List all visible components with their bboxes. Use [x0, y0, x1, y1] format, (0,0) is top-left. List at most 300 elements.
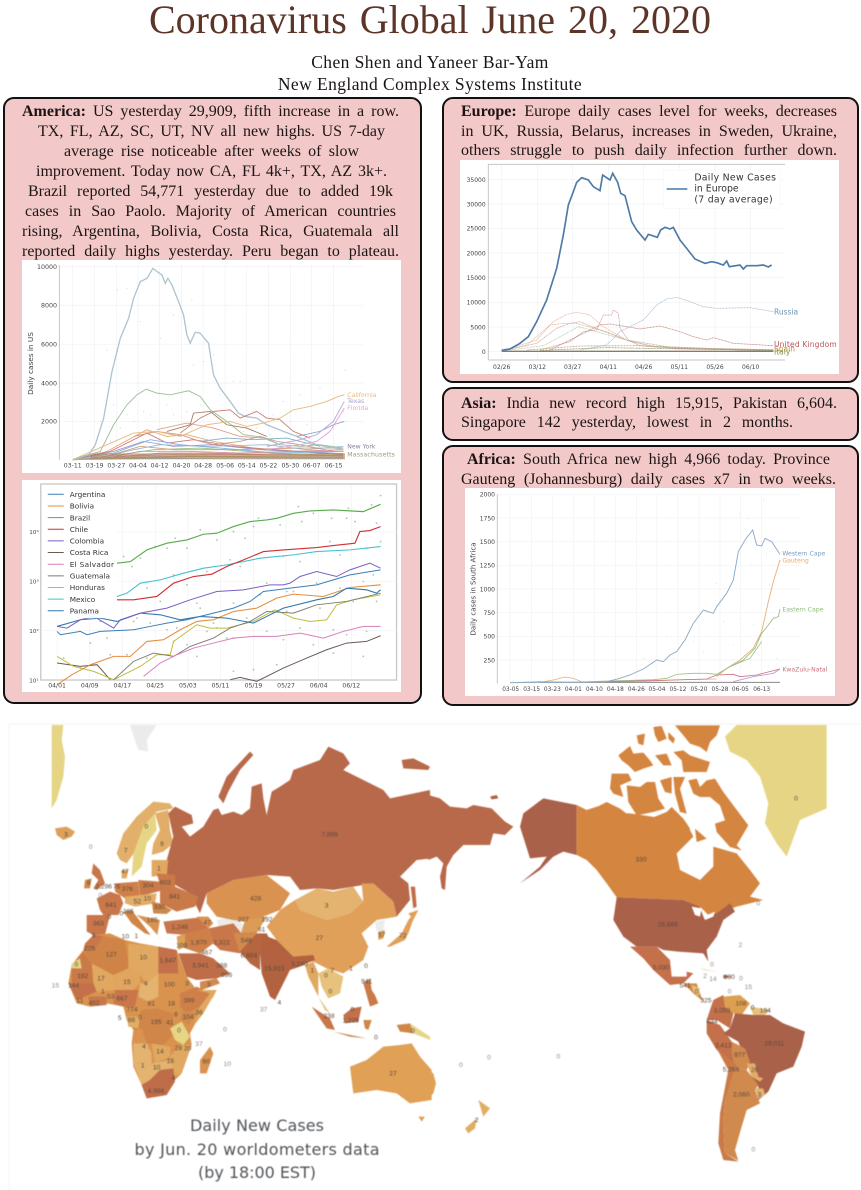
Europe text: in UK, Russia, Belarus, increases in Sweden, Ukraine, [461, 122, 837, 140]
map labels: Eurasia and Africa: 53 [107, 993, 115, 1000]
chart: Latin American countries (log scale): 10² [29, 628, 39, 635]
map labels: Eurasia and Africa: 104 [182, 1014, 194, 1021]
map labels: Americas: 0 [739, 975, 743, 982]
New Jersey line [73, 389, 343, 460]
map labels: Americas: 29,011 [764, 1041, 785, 1048]
map labels: Eurasia and Africa: 1,647 [159, 957, 176, 964]
map labels: Eurasia and Africa: 1 [134, 933, 138, 940]
chart: South Africa provinces: 06-13 [753, 687, 770, 693]
province labels: Eastern Cape [782, 606, 824, 613]
chart: Europe daily new cases: 03/12 [529, 364, 546, 371]
map: Americas and Pacific [428, 725, 827, 1162]
map labels: Eurasia and Africa: 207 [238, 917, 249, 924]
chart: daily cases in US: 03-27 [107, 462, 125, 469]
chart: Latin American countries (log scale): 10³ [29, 579, 39, 586]
map labels: Eurasia and Africa: 1 [157, 866, 161, 873]
map labels: Eurasia and Africa: 195 [150, 1019, 162, 1026]
map labels: Americas: 3,413 [715, 1043, 732, 1050]
chart: Latin American countries (log scale): 06/12 [342, 682, 360, 689]
map labels: Eurasia and Africa: 546 [241, 938, 252, 945]
map labels: Eurasia and Africa: 388 [216, 963, 228, 970]
map labels: Eurasia and Africa: 1 [101, 988, 105, 995]
chart: Latin American countries (log scale): 06/04 [310, 682, 328, 689]
map labels: Eurasia and Africa: 226 [84, 945, 96, 952]
map labels: Eurasia and Africa: 0 [223, 1026, 227, 1033]
map labels: Eurasia and Africa: 72 [399, 933, 407, 940]
Panama [57, 588, 381, 626]
map labels: Eurasia and Africa: 6 [87, 880, 91, 887]
map labels: Americas: 2,060 [733, 1092, 750, 1099]
chart: daily cases in US: 04-04 [129, 462, 147, 469]
map labels: Eurasia and Africa: 36 [195, 1010, 203, 1017]
map labels: Americas: 2 [738, 942, 742, 949]
chart: South Africa provinces: 2000 [480, 492, 495, 499]
map labels: Eurasia and Africa: 109 [176, 943, 188, 950]
map labels: Eurasia and Africa: 27 [316, 935, 323, 942]
chart: South Africa provinces: 04-18 [607, 687, 624, 693]
Europe text: Europe: Europe daily cases level for weeks, decreases [461, 103, 837, 120]
chart: Europe daily new cases: 05/11 [671, 364, 688, 371]
map labels: Eurasia and Africa: 3 [64, 831, 68, 838]
map labels: Eurasia and Africa: 0 [119, 911, 123, 918]
legend: Brazil [70, 513, 90, 522]
Europe text [461, 103, 837, 158]
map labels: Eurasia and Africa: 265 [123, 909, 134, 916]
America text: improvement. Today now CA, FL 4k+, TX, AZ 3k+. [36, 163, 387, 180]
chart: Europe daily new cases [460, 160, 839, 374]
map labels: Eurasia and Africa: 15 [123, 979, 131, 986]
map labels: Eurasia and Africa: 10 [122, 934, 129, 941]
world map [51, 724, 828, 1182]
map labels: Americas: 2 [475, 1117, 479, 1124]
map labels: Eurasia and Africa: 330 [154, 904, 165, 911]
chart: daily cases in US: 05-22 [259, 462, 277, 469]
map labels: Eurasia and Africa: 20 [184, 1046, 192, 1053]
map labels: Eurasia and Africa: 7 [330, 967, 334, 974]
map labels: Eurasia and Africa: 60 [203, 1059, 210, 1066]
map labels: Eurasia and Africa: 100 [164, 981, 175, 988]
map labels: Eurasia and Africa: 1 [349, 966, 353, 973]
map labels: Eurasia and Africa: 0 [74, 962, 78, 969]
map labels: Eurasia and Africa: 27 [389, 1070, 397, 1077]
chart: daily cases in US [22, 260, 401, 473]
map labels: Eurasia and Africa: 15 [52, 982, 59, 989]
authors: New England Complex Systems Institute [278, 74, 582, 94]
map labels: Eurasia and Africa: 1,226 [342, 1018, 359, 1025]
map labels: Eurasia and Africa: 192 [77, 973, 89, 980]
province labels [782, 551, 828, 673]
map labels: Eurasia and Africa: 47 [204, 919, 211, 926]
South America [707, 995, 733, 1028]
map labels: Eurasia and Africa: 2,296 [95, 883, 112, 890]
chart: South Africa provinces: 04-26 [628, 687, 645, 693]
panel: Asia [442, 387, 859, 441]
map labels: Eurasia and Africa: 144 [68, 983, 80, 990]
map labels: Eurasia and Africa: 10 [224, 1061, 231, 1068]
chart: daily cases in US: 10000 [37, 264, 57, 271]
America text [22, 103, 399, 260]
map labels: Americas: 14 [709, 976, 717, 983]
America text: cases in Sao Paolo. Majority of American countries [25, 203, 396, 220]
Baltics [152, 860, 168, 877]
chart: South Africa provinces: 1000 [480, 586, 495, 593]
map labels: Eurasia and Africa: 376 [122, 886, 133, 893]
America text: average rise noticeable after weeks of slow [64, 143, 359, 160]
map labels: Eurasia and Africa: 47 [121, 869, 129, 876]
map labels: Eurasia and Africa: 467 [201, 950, 213, 957]
map labels: Eurasia and Africa: 6,604 [241, 953, 258, 960]
map labels: Americas [459, 795, 798, 1153]
chart legend: (7 day average) [694, 195, 773, 206]
South Asia and Middle East [180, 928, 213, 953]
map labels: Eurasia and Africa: 1 [310, 968, 314, 975]
Asia text: Singapore 142 yesterday, lowest in 2 months. [461, 414, 793, 431]
map labels: Eurasia and Africa: 941 [361, 978, 373, 985]
map labels: Eurasia and Africa: 76 [113, 883, 121, 890]
state labels: California [347, 392, 377, 399]
chart: Latin American countries (log scale): 10⁴ [29, 529, 39, 536]
chart: Latin American countries (log scale) [22, 480, 401, 692]
panel: America [3, 97, 422, 704]
chart: South Africa provinces: 06-05 [732, 687, 749, 693]
chart: Europe daily new cases: 02/26 [493, 364, 510, 371]
Europe total line [502, 173, 772, 350]
Canada [577, 803, 763, 917]
map labels: Eurasia and Africa: 37 [195, 1041, 203, 1048]
map labels: Eurasia and Africa: 192 [261, 917, 273, 924]
map labels: Eurasia and Africa: 3 [185, 981, 189, 988]
map caption: Daily New Cases [190, 1116, 324, 1135]
chart: South Africa provinces: 500 [484, 634, 495, 641]
map labels: Eurasia and Africa: 4 [277, 1000, 281, 1007]
legend: Argentina [70, 490, 105, 499]
map labels: Americas: 0 [756, 901, 760, 908]
Florida line [267, 408, 344, 450]
chart: daily cases in US: 05-30 [281, 462, 299, 469]
chart: Europe daily new cases: 03/27 [564, 364, 581, 371]
chart: South Africa provinces: 03-05 [502, 687, 519, 693]
legend: Chile [70, 525, 89, 534]
map labels: Americas: 3 [757, 1091, 761, 1098]
map labels: Americas: 0 [751, 1146, 755, 1153]
Africa text: Gauteng (Johannesburg) daily cases x7 in two weeks. [461, 470, 836, 488]
map labels: Eurasia and Africa: 238 [323, 1013, 335, 1020]
chart: Europe daily new cases: 04/26 [635, 364, 652, 371]
Africa [68, 933, 217, 1098]
map caption: by Jun. 20 worldometers data [134, 1140, 380, 1159]
Texas line [267, 401, 344, 446]
map labels: Eurasia and Africa: 641 [105, 902, 117, 909]
map labels: Eurasia and Africa: 3 [325, 903, 329, 910]
map labels: Eurasia and Africa: 7 [124, 847, 128, 854]
Bolivia [57, 585, 381, 685]
map labels: Eurasia and Africa: 0 [328, 989, 332, 996]
legend: Honduras [70, 583, 105, 592]
map labels: Americas: 0 [556, 1054, 560, 1061]
Brazil [117, 504, 381, 563]
chart: Latin American countries (log scale): 04/09 [81, 682, 99, 689]
chart: South Africa provinces: 04-01 [565, 687, 582, 693]
chart: South Africa provinces [465, 488, 835, 696]
Gauteng line [717, 560, 780, 677]
authors [278, 52, 582, 94]
map labels: Eurasia and Africa: 0 [374, 1034, 378, 1041]
chart: daily cases in US: 2000 [41, 419, 57, 426]
map labels: Americas: 5,266 [723, 1067, 740, 1074]
map labels: Eurasia and Africa: 8 [174, 1011, 178, 1018]
Eastern Cape line [717, 609, 780, 675]
chart: Europe daily new cases: 25000 [467, 226, 486, 233]
Asia text: Asia: India new record high 15,915, Pakistan 6,604. [461, 394, 837, 412]
Chile [117, 527, 381, 600]
map: Eurasia, Africa, Australia [52, 725, 432, 1122]
province labels: KwaZulu-Natal [782, 666, 828, 673]
country labels: Russia [774, 307, 798, 316]
chart: Latin American countries (log scale): 04/01 [48, 682, 66, 689]
map labels: Americas: 0 [459, 1062, 463, 1069]
chart: South Africa provinces: 1250 [480, 563, 495, 570]
Colombia [57, 563, 381, 628]
map labels: Eurasia and Africa: 1,248 [171, 924, 188, 931]
legend: Costa Rica [70, 548, 108, 557]
Russia [167, 747, 432, 917]
country labels [774, 307, 837, 356]
Argentina [57, 570, 381, 635]
chart: South Africa provinces: 1500 [480, 539, 495, 546]
map labels: Americas: 0 [728, 988, 732, 995]
chart: Europe daily new cases: 20000 [467, 250, 486, 257]
Honduras [57, 595, 381, 680]
chart: Europe daily new cases: 06/10 [742, 364, 759, 371]
chart: daily cases in US: 4000 [41, 380, 57, 387]
province labels: Gauteng [782, 558, 809, 565]
state labels: New York [347, 444, 376, 451]
chart: Europe daily new cases: 10000 [467, 300, 486, 307]
Europe text: others struggle to push daily infection further down. [461, 142, 837, 158]
map labels: Eurasia and Africa: 896 [221, 972, 233, 979]
map labels: Americas: 26 [751, 1067, 759, 1074]
map labels: Eurasia and Africa: 0 [411, 1028, 415, 1035]
chart: Latin American countries (log scale): 05/03 [179, 682, 197, 689]
chart: Europe daily new cases: 0 [482, 349, 486, 356]
map labels: Eurasia and Africa: 774 [126, 1006, 138, 1013]
chart: daily cases in US: 06-15 [325, 462, 343, 469]
Australia [350, 1043, 432, 1122]
chart: daily cases in US: 04-28 [194, 462, 212, 469]
country labels: Spain [774, 345, 795, 354]
map labels: Eurasia and Africa: 3,941 [192, 962, 209, 969]
chart: Europe daily new cases: 30000 [467, 201, 486, 208]
map labels: Eurasia and Africa: 4,966 [148, 1088, 165, 1095]
map labels: Eurasia and Africa: 81 [148, 1000, 155, 1007]
map labels: Eurasia and Africa: 3,240 [291, 961, 308, 968]
Mexico [630, 947, 693, 985]
USA [613, 897, 735, 962]
map labels: Eurasia and Africa: 304 [142, 883, 154, 890]
map labels: Americas: 0 [751, 1004, 755, 1011]
low-level state lines [73, 423, 343, 460]
map labels: Eurasia and Africa: 4 [171, 1075, 175, 1082]
map labels: Eurasia and Africa: 3 [207, 981, 211, 988]
map labels: Eurasia and Africa: 428 [250, 895, 262, 902]
map labels: Eurasia and Africa: 1,870 [190, 939, 207, 946]
chart: daily cases in US: 05-06 [216, 462, 234, 469]
map labels: Eurasia and Africa: 2,322 [213, 939, 230, 946]
El Salvador [144, 626, 381, 676]
chart: Europe daily new cases: 05/26 [706, 364, 724, 371]
map labels: Eurasia and Africa: 4 [144, 981, 148, 988]
Africa text: Africa: South Africa new high 4,966 today. Province [467, 450, 830, 468]
map labels: Eurasia and Africa [52, 824, 415, 1095]
legend: Bolivia [70, 502, 94, 511]
map labels: Eurasia and Africa: 10 [153, 1065, 161, 1072]
chart: South Africa provinces: 250 [484, 657, 495, 664]
Mexico [117, 547, 381, 596]
map labels: Eurasia and Africa: 0 [350, 1007, 354, 1014]
map labels: Americas: 634 [706, 1018, 718, 1025]
Greenland [725, 725, 827, 857]
Africa text [461, 450, 836, 488]
Guatemala [114, 593, 381, 680]
map labels: Eurasia and Africa: 402 [88, 1000, 100, 1007]
chart: Latin American countries (log scale): 05/27 [277, 682, 295, 689]
state labels [346, 392, 395, 459]
map labels: Americas: 541 [679, 983, 691, 990]
map labels: Eurasia and Africa: 17 [97, 976, 105, 983]
Europe [84, 863, 213, 935]
map labels: Eurasia and Africa: 57 [378, 932, 386, 939]
chart: South Africa provinces: 05-28 [712, 687, 729, 693]
legend: El Salvador [70, 560, 114, 569]
chart: Latin American countries (log scale): 10¹ [29, 677, 39, 684]
chart: daily cases in US: 03-19 [86, 462, 104, 469]
chart: Latin American countries (log scale): 05/19 [245, 682, 262, 689]
chart: Latin American countries (log scale): 05/11 [212, 682, 229, 689]
chart: South Africa provinces: 05-20 [691, 687, 708, 693]
chart: daily cases in US: Daily cases in US [26, 332, 35, 395]
map labels: Americas: 15 [745, 984, 752, 991]
panel: Africa [442, 445, 859, 706]
map labels: Eurasia and Africa: 0 [144, 824, 148, 831]
chart: Latin American countries (log scale): 04/17 [113, 682, 131, 689]
legend: Mexico [70, 595, 96, 604]
other major lines [167, 411, 267, 436]
map labels: Americas: 108 [735, 1000, 747, 1007]
province labels: Western Cape [782, 551, 826, 558]
map labels: Eurasia and Africa: 4 [142, 1043, 146, 1050]
map labels: Eurasia and Africa: 0 [89, 844, 93, 851]
New York line [73, 268, 343, 460]
chart: daily cases in US: 03-11 [64, 462, 82, 469]
map labels: Eurasia and Africa: 0 [107, 914, 111, 921]
chart: South Africa provinces: 03-23 [544, 687, 561, 693]
map labels: Eurasia and Africa: 61 [258, 926, 266, 933]
map labels: Eurasia and Africa: 37 [260, 1006, 268, 1013]
map labels: Eurasia and Africa: 363 [93, 920, 104, 927]
map labels: Eurasia and Africa: 603 [160, 880, 171, 887]
legend: Colombia [70, 537, 104, 546]
authors: Chen Shen and Yaneer Bar-Yam [311, 52, 549, 72]
map labels: Eurasia and Africa: 841 [169, 894, 181, 901]
state labels: Texas [346, 398, 364, 405]
map labels: Eurasia and Africa: 14 [156, 1049, 164, 1056]
legend: Guatemala [70, 572, 110, 581]
map labels: Eurasia and Africa: 10 [144, 895, 151, 902]
map labels: Eurasia and Africa: 1 [141, 1063, 145, 1070]
map labels: Eurasia and Africa: 10 [140, 955, 147, 962]
map labels: Eurasia and Africa: 667 [116, 996, 128, 1003]
Asia text [461, 394, 837, 431]
map caption [134, 1116, 380, 1182]
chart: daily cases in US: 04-20 [173, 462, 191, 469]
map labels: Eurasia and Africa: 0 [324, 972, 328, 979]
map labels: Eurasia and Africa: 11 [77, 997, 84, 1004]
America text: reported daily highs yesterday. Peru began to plateau. [22, 243, 399, 260]
map labels: Americas: 3,059 [714, 1007, 731, 1014]
map labels: Eurasia and Africa: 18 [168, 1000, 175, 1007]
Western Cape line [510, 530, 780, 683]
map labels: Eurasia and Africa: 9 [160, 841, 164, 848]
chart: Europe daily new cases: 35000 [467, 177, 486, 184]
country labels: United Kingdom [774, 340, 837, 349]
chart legend: Daily New Cases [694, 173, 776, 184]
state labels: Massachusetts [347, 452, 395, 459]
chart: Europe daily new cases: 04/11 [600, 364, 617, 371]
map labels: Eurasia and Africa: 185 [147, 917, 158, 924]
chart: South Africa provinces: 03-15 [523, 687, 540, 693]
map labels: Americas: 977 [734, 1052, 746, 1059]
map labels: Eurasia and Africa: 399 [183, 998, 195, 1005]
country lines [502, 297, 773, 351]
state labels: Florida [347, 405, 368, 412]
California line [73, 395, 344, 460]
map labels: Americas: 2 [703, 973, 707, 980]
map labels: Eurasia and Africa: 7,889 [321, 831, 338, 838]
legend [43, 487, 117, 618]
map labels: Americas: 0 [710, 961, 714, 968]
chart: South Africa provinces: 05-04 [649, 687, 666, 693]
chart: Europe daily new cases: 15000 [467, 275, 486, 282]
map labels: Eurasia and Africa: 5 [92, 932, 96, 939]
map labels: Americas: 330 [635, 857, 647, 864]
map labels: Eurasia and Africa: 16 [167, 1058, 174, 1065]
chart: South Africa provinces: 750 [484, 610, 495, 617]
chart: South Africa provinces: Daily cases in South Africa [469, 542, 477, 636]
map labels: Americas: 28,869 [657, 921, 678, 928]
chart: daily cases in US: 8000 [41, 303, 57, 310]
map labels: Eurasia and Africa: 127 [106, 951, 117, 958]
map labels: Americas: 194 [760, 1008, 771, 1015]
map labels: Eurasia and Africa: 0 [364, 963, 368, 970]
chart legend [663, 170, 780, 208]
chart: South Africa provinces: 04-10 [586, 687, 603, 693]
chart: South Africa provinces: 1750 [480, 515, 495, 522]
chart: Latin American countries (log scale): 04/25 [146, 682, 164, 689]
map labels: Americas: 330 [724, 974, 735, 981]
chart: daily cases in US: 06-07 [303, 462, 321, 469]
map: Arctic Canada [600, 725, 748, 852]
map labels: Eurasia and Africa: 88 [128, 1017, 135, 1024]
map labels: Eurasia and Africa: 28 [175, 1045, 182, 1052]
chart: daily cases in US: 05-14 [238, 462, 256, 469]
map labels: Eurasia and Africa: 41 [166, 1020, 174, 1027]
America text: rising, Argentina, Bolivia, Costa Rica, Guatemala all [22, 223, 399, 240]
Alaska [520, 798, 577, 883]
map labels: Americas: 325 [700, 998, 712, 1005]
chart: daily cases in US: 04-12 [151, 462, 169, 469]
chart legend: in Europe [694, 184, 739, 195]
chart: South Africa provinces: 05-12 [670, 687, 687, 693]
